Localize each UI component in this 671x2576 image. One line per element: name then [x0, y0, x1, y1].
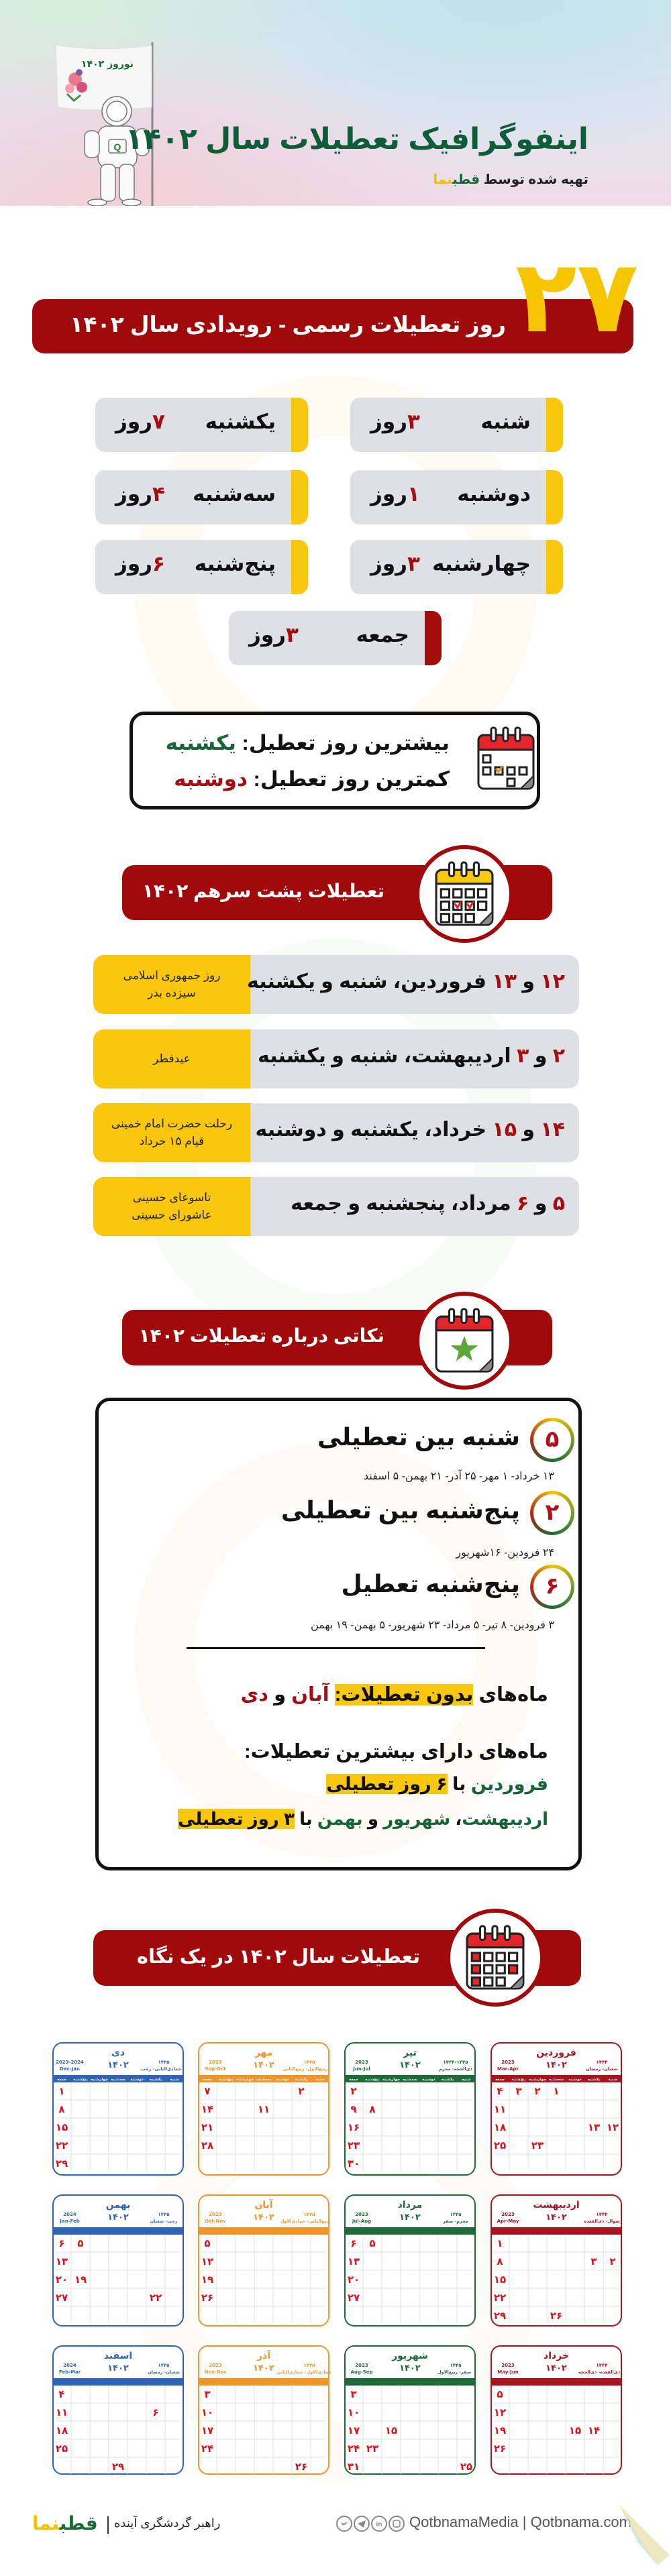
calendar: تیر: ۱۴۴۴-۱۴۴۵	[443, 2060, 468, 2065]
calendar: خرداد: ۱۵	[569, 2424, 581, 2437]
row: اردیبهشت	[93, 1029, 579, 1088]
calendar: شهریور: شهریور	[391, 2351, 428, 2361]
calendar: شهریور: ۱۴۰۲	[399, 2363, 421, 2373]
calendar: دی: ۲۹	[56, 2158, 68, 2170]
note 3 heading: پنج‌شنبه تعطیل	[341, 1570, 520, 1598]
weekday labels: چهارشنبه	[529, 2078, 546, 2082]
calendar: اردیبهشت: ۱۴۴۴	[596, 2212, 608, 2217]
panel: day counts	[95, 398, 563, 665]
calendar: دی: ۲۲	[56, 2139, 68, 2151]
note 2 dates: ۲۴ فرودین- ۱۶شهریور	[456, 1547, 554, 1559]
day: دوشنبه: دوشنبه	[457, 482, 531, 506]
calendar: اسفند: ۶	[152, 2406, 159, 2418]
calendar: مرداد: ۲۰	[348, 2274, 360, 2286]
day: سه‌شنبه	[95, 470, 308, 524]
row: فروردین: ۱۲ و ۱۳ فروردین، شنبه و یکشنبه	[247, 970, 565, 993]
calendar: اردیبهشت: ۱۵	[494, 2274, 506, 2286]
calendar: تیر: ۲	[350, 2085, 357, 2097]
calendar: مهر: ۱۴۰۲	[253, 2060, 274, 2070]
day: یکشنبه: ۷روز	[115, 410, 165, 433]
calendar: اردیبهشت	[491, 2195, 621, 2326]
farvardin line: فروردین با ۶ روز تعطیلی	[326, 1774, 548, 1794]
note 3 badge: ۶	[546, 1573, 559, 1599]
row: فروردین: روز جمهوری اسلامی	[123, 969, 220, 982]
banner: 27 days	[32, 299, 633, 353]
background watermark 4	[134, 2079, 537, 2481]
weekday labels: چهارشنبه	[91, 2078, 108, 2082]
calendar: مهر: ۱۱	[258, 2103, 270, 2115]
row: خرداد	[93, 1103, 579, 1162]
calendar: مرداد: ۶	[350, 2237, 357, 2249]
calendar: آذر: ۱۴۴۵	[303, 2363, 315, 2368]
text: least holiday day: کمترین روز تعطیل: دوشنبه	[174, 767, 450, 791]
day: پنج‌شنبه: ۶روز	[115, 552, 165, 575]
calendar: فروردین: ۱	[553, 2085, 560, 2097]
calendar: خرداد: خرداد	[544, 2351, 569, 2361]
social icons	[336, 2516, 405, 2532]
calendar: بهمن: 2024	[63, 2212, 76, 2217]
calendar: آذر: آذر	[256, 2349, 271, 2361]
calendar: مهر	[199, 2043, 329, 2175]
calendar: اسفند: ۱۸	[56, 2424, 68, 2437]
row: مرداد: عاشورای حسینی	[132, 1209, 212, 1221]
calendar: بهمن: ۱۹	[74, 2274, 87, 2286]
tagline: راهبر گردشگری آینده	[114, 2516, 220, 2530]
icon: calendar star	[415, 1292, 513, 1390]
weekday labels: پنج‌شنبه	[219, 2078, 234, 2082]
illustration: astronaut with flag: Q	[114, 142, 121, 152]
calendar: شهریور: ۲۴	[348, 2443, 360, 2455]
calendar: بهمن: ۱۳	[56, 2255, 68, 2267]
calendar: مرداد	[345, 2195, 475, 2326]
other months line: اردیبهشت، شهریور و بهمن با ۳ روز تعطیلی	[178, 1809, 548, 1829]
calendar: دی: ۱۴۴۵	[158, 2060, 170, 2065]
calendar: بهمن: ۱۴۴۵	[158, 2212, 170, 2217]
note 1 badge: ۵	[546, 1426, 559, 1452]
banner title: روز تعطیلات رسمی - رویدادی سال ۱۴۰۲	[70, 312, 506, 337]
calendar: خرداد: ۱۴۰۲	[546, 2363, 567, 2373]
calendar: اسفند: ۱۱	[56, 2406, 68, 2418]
calendar: اردیبهشت: ۲	[609, 2255, 616, 2267]
day: جمعه: ۳روز	[249, 623, 299, 647]
calendar: مرداد: 2023	[355, 2212, 368, 2217]
calendar: تیر: ۳۰	[348, 2158, 360, 2170]
calendar: اردیبهشت: شوال- ذی‌القعده	[584, 2219, 620, 2224]
weekday labels: جمعه	[57, 2078, 66, 2082]
calendar: شهریور: ۱۷	[348, 2424, 360, 2437]
background watermark 2	[134, 939, 537, 1355]
calendar: مهر: ۱۴۴۵	[303, 2060, 315, 2065]
footer	[32, 2505, 670, 2565]
calendar: اسفند: ۱۴۰۲	[107, 2363, 129, 2373]
calendar: مرداد: Jul-Aug	[352, 2219, 371, 2224]
heading: year at a glance	[93, 1930, 581, 1986]
calendar: اردیبهشت: ۲۹	[494, 2310, 506, 2322]
calendar: تیر: ۱۴۰۲	[399, 2060, 421, 2070]
hero header	[0, 0, 671, 206]
separator	[107, 2516, 109, 2534]
day: سه‌شنبه: ۴روز	[115, 482, 165, 506]
weekday labels: شنبه	[315, 2078, 325, 2082]
calendar: آذر: ۱۰	[201, 2406, 213, 2418]
calendar: آبان: آبان	[254, 2198, 274, 2210]
day: شنبه: شنبه	[480, 410, 531, 433]
calendar: فروردین	[491, 2043, 621, 2175]
note 3 dates: ۳ فرودین- ۸ تیر- ۵ مرداد- ۲۳ شهریور- ۵ بهمن- ۱۹ بهمن	[311, 1620, 554, 1631]
calendar: آبان: ۱۴۴۵	[303, 2212, 315, 2217]
calendars grid	[52, 2042, 622, 2475]
calendar: تیر: ۱۶	[348, 2121, 360, 2133]
calendar: شهریور	[345, 2346, 475, 2474]
website text: QotbnamaMedia | Qotbnama.com	[409, 2514, 631, 2530]
weekday labels: شنبه	[170, 2078, 179, 2082]
logo: قطبنما	[32, 2513, 98, 2534]
calendar: شهریور: ۲۵	[460, 2461, 472, 2473]
calendar: شهریور: ۳	[350, 2388, 357, 2400]
day: یکشنبه: یکشنبه	[205, 410, 276, 433]
note 2 badge	[530, 1491, 574, 1535]
calendar: مهر: ۲۸	[201, 2139, 213, 2151]
calendar: اردیبهشت: 2023	[501, 2212, 515, 2217]
calendar: خرداد: May-Jun	[497, 2369, 519, 2375]
calendar: تیر: ۹	[350, 2103, 357, 2115]
calendar: بهمن: رجب- شعبان	[150, 2219, 178, 2224]
calendar: مرداد: ۵	[369, 2237, 376, 2249]
big number 27: ۲۷	[515, 240, 638, 353]
calendar: اسفند: Feb-Mar	[59, 2369, 81, 2375]
calendar: اسفند: ۱۴۴۵	[158, 2363, 170, 2368]
calendar: فروردین: شعبان- رمضان	[586, 2066, 618, 2072]
calendar: دی: جمادی‌الثانی- رجب	[141, 2066, 181, 2072]
calendar: اردیبهشت: Apr-May	[497, 2219, 519, 2224]
calendar: آبان: ۱۹	[201, 2274, 213, 2286]
weekday labels: سه‌شنبه	[403, 2078, 417, 2082]
note 3 badge	[530, 1565, 574, 1609]
day: چهارشنبه: ۳روز	[370, 552, 420, 575]
calendar: آبان: ۱۴۰۲	[253, 2213, 274, 2223]
calendar: اسفند: ۲۵	[56, 2443, 68, 2455]
calendar: مهر: مهر	[254, 2048, 272, 2058]
calendar: شهریور: ۱۰	[348, 2406, 360, 2418]
day: جمعه: جمعه	[356, 623, 409, 647]
note 1 dates: ۱۳ خرداد- ۱ مهر- ۲۵ آذر- ۲۱ بهمن- ۵ اسفند	[364, 1471, 554, 1482]
calendar: شهریور: ۱۵	[385, 2424, 397, 2437]
calendar: شهریور: صفر- ربیع‌الاول	[437, 2369, 471, 2375]
weekday labels: پنج‌شنبه	[511, 2078, 526, 2082]
illustration: astronaut with flag	[55, 42, 153, 206]
row: خرداد: ۱۴ و ۱۵ خرداد، یکشنبه و دوشنبه	[256, 1119, 565, 1141]
calendar: خرداد	[491, 2346, 621, 2474]
calendar: فروردین: ۱۸	[494, 2121, 506, 2133]
day: چهارشنبه	[350, 540, 563, 594]
calendar: مرداد: ۱۴۴۵	[450, 2212, 462, 2217]
calendar: مرداد: ۲۷	[348, 2292, 360, 2304]
heading text: نکاتی درباره تعطیلات ۱۴۰۲	[139, 1325, 384, 1346]
calendar: فروردین: ۱۱	[494, 2103, 506, 2115]
calendar: خرداد: ۱۴۴۴	[596, 2363, 608, 2368]
weekday labels: دوشنبه	[130, 2078, 144, 2082]
calendar: بهمن: Jan-Feb	[59, 2219, 80, 2224]
day: چهارشنبه: چهارشنبه	[432, 552, 531, 575]
weekday labels: شنبه	[608, 2078, 617, 2082]
calendar: فروردین: ۲۳	[531, 2139, 544, 2151]
calendar: تیر: تیر	[403, 2048, 417, 2058]
calendar: شهریور: 2023	[355, 2363, 368, 2368]
calendar: فروردین: ۴	[497, 2085, 503, 2097]
row: مرداد: تاسوعای حسینی	[133, 1191, 211, 1204]
calendar: تیر: Jun-Jul	[352, 2066, 370, 2072]
weekday labels: دوشنبه	[422, 2078, 435, 2082]
callout: most/least holiday day	[130, 712, 540, 809]
calendar: خرداد: ۵	[497, 2388, 503, 2400]
calendar: مهر: ۲	[298, 2085, 305, 2097]
calendar: اردیبهشت: ۲۶	[550, 2310, 562, 2322]
divider	[187, 1647, 485, 1649]
background watermark 3	[134, 1442, 537, 1858]
day: جمعه	[229, 611, 442, 665]
calendar: اسفند: ۴	[58, 2388, 65, 2400]
text: most holiday day: بیشترین روز تعطیل: یکشنبه	[166, 731, 450, 754]
calendar: فروردین: Mar-Apr	[497, 2066, 519, 2072]
calendar: خرداد: ذی‌القعده- ذی‌الحجه	[578, 2369, 621, 2375]
calendar: فروردین: 2023	[501, 2060, 515, 2065]
subtitle: تهیه شده توسط قطبنما	[433, 172, 588, 187]
calendar: فروردین: ۱۲	[607, 2121, 619, 2133]
weekday labels	[57, 2077, 617, 2082]
calendar: دی: 2023-2024	[56, 2060, 84, 2065]
calendar: آبان: ۱۲	[201, 2255, 213, 2267]
note 1 badge	[530, 1418, 574, 1462]
calendar: دی	[53, 2043, 183, 2175]
weekday labels: چهارشنبه	[236, 2078, 254, 2082]
heading: notes	[122, 1310, 552, 1365]
row: اردیبهشت: ۲ و ۳ اردیبهشت، شنبه و یکشنبه	[258, 1045, 565, 1067]
day: پنج‌شنبه	[95, 540, 308, 594]
day: سه‌شنبه: سه‌شنبه	[193, 482, 276, 506]
row: فروردین: سیزده بدر	[148, 987, 196, 999]
calendar: اسفند: ۲۹	[112, 2461, 124, 2473]
note 2 heading: پنج‌شنبه بین تعطیلی	[281, 1496, 520, 1524]
calendar: فروردین: ۱۴۴۴	[596, 2060, 608, 2065]
weekday labels: سه‌شنبه	[256, 2078, 271, 2082]
calendar: دی: دی	[111, 2048, 125, 2058]
weekday labels: سه‌شنبه	[549, 2078, 564, 2082]
calendar: آذر: Nov-Dec	[205, 2369, 226, 2375]
calendar: مرداد: ۱۴۰۲	[399, 2213, 421, 2223]
calendar: اسفند: اسفند	[104, 2351, 132, 2361]
months with most holidays: ماه‌های دارای بیشترین تعطیلات:	[244, 1741, 548, 1762]
heading text: تعطیلات پشت سرهم ۱۴۰۲	[142, 881, 384, 901]
day: شنبه	[350, 398, 563, 452]
calendar: مهر: ربیع‌الاول- ربیع‌الثانی	[282, 2066, 328, 2072]
weekday labels: یکشنبه	[150, 2077, 162, 2082]
day: دوشنبه	[350, 470, 563, 524]
calendar: مهر: 2023	[209, 2060, 222, 2065]
calendar: اردیبهشت: ۳	[590, 2255, 597, 2267]
calendar: مرداد: ۱۳	[348, 2255, 360, 2267]
calendar: مهر: ۲۱	[201, 2121, 213, 2133]
calendar: اسفند: 2024	[63, 2363, 76, 2368]
calendar: دی: Dec-Jan	[60, 2066, 80, 2072]
calendar: مهر: ۷	[204, 2085, 211, 2097]
weekday labels: یکشنبه	[295, 2077, 307, 2082]
calendar: فروردین: ۱۴۰۲	[546, 2060, 567, 2070]
calendar: شهریور: ۳۱	[348, 2461, 360, 2473]
calendar: فروردین: فروردین	[536, 2048, 576, 2058]
calendar: اسفند	[53, 2346, 183, 2474]
calendar: بهمن: ۱۴۰۲	[107, 2213, 129, 2223]
calendar: دی: ۸	[58, 2103, 65, 2115]
row: فروردین	[93, 955, 579, 1014]
calendar: آذر: ۱۴۰۲	[253, 2363, 274, 2373]
calendar: تیر: ذی‌الحجه- محرم	[439, 2066, 473, 2072]
calendar: آذر: ۲۶	[295, 2461, 307, 2473]
calendar: اردیبهشت: ۱	[497, 2237, 503, 2249]
illustration: astronaut with flag: نوروز ۱۴۰۲	[81, 59, 134, 70]
calendar: تیر: 2023	[355, 2060, 368, 2065]
calendar: خرداد: ۱۲	[494, 2406, 506, 2418]
calendar: بهمن: بهمن	[106, 2200, 130, 2210]
calendar: تیر: ۲۳	[348, 2139, 360, 2151]
calendar: اسفند: شعبان- رمضان	[148, 2369, 180, 2375]
calendar: اردیبهشت: ۸	[497, 2255, 503, 2267]
weekday labels: دوشنبه	[276, 2078, 289, 2082]
panel: notes	[95, 1398, 582, 1870]
weekday labels: پنج‌شنبه	[73, 2078, 88, 2082]
background watermark	[134, 376, 537, 791]
calendar: دی: ۱	[58, 2085, 65, 2097]
weekday labels: پنج‌شنبه	[365, 2078, 380, 2082]
calendar: آبان: Oct-Nov	[205, 2219, 226, 2224]
calendar: بهمن: ۲۷	[56, 2292, 68, 2304]
calendar: آبان: 2023	[209, 2212, 222, 2217]
calendar: آبان: ۵	[204, 2237, 211, 2249]
calendar: بهمن: ۶	[58, 2237, 65, 2249]
calendar: بهمن	[53, 2195, 183, 2326]
calendar: بهمن: ۵	[77, 2237, 84, 2249]
day: شنبه: ۳روز	[370, 410, 420, 433]
calendar: مهر: Sep-Oct	[205, 2066, 226, 2072]
heading: back-to-back holidays	[122, 865, 552, 920]
calendar: مرداد: مرداد	[398, 2200, 422, 2210]
calendar: خرداد: ۱۴	[588, 2424, 600, 2437]
calendar: اردیبهشت: اردیبهشت	[533, 2200, 580, 2210]
calendar: آذر: ۱۷	[201, 2424, 213, 2437]
calendar: شهریور: ۲۳	[366, 2443, 378, 2455]
calendar: آذر: جمادی‌الاول- جمادی‌الثانی	[276, 2369, 331, 2375]
weekday labels: یکشنبه	[588, 2077, 600, 2082]
day: دوشنبه: ۱روز	[370, 482, 420, 506]
calendar: آبان: ۲۶	[201, 2292, 213, 2304]
weekday labels: چهارشنبه	[382, 2078, 400, 2082]
calendar: خرداد: 2023	[501, 2363, 515, 2368]
calendar: تیر	[345, 2043, 475, 2175]
weekday labels: دوشنبه	[568, 2078, 582, 2082]
row: مرداد	[93, 1177, 579, 1236]
row: مرداد: ۵ و ۶ مرداد، پنجشنبه و جمعه	[291, 1192, 565, 1215]
calendar: بهمن: ۲۲	[150, 2292, 162, 2304]
weekday labels: یکشنبه	[442, 2077, 454, 2082]
social icons: in	[376, 2521, 382, 2528]
calendar: اردیبهشت: ۱۴۰۲	[546, 2213, 567, 2223]
corner decoration	[619, 2505, 670, 2565]
calendar: اردیبهشت: ۲۲	[494, 2292, 506, 2304]
note 1 heading: شنبه بین تعطیلی	[317, 1423, 520, 1451]
note 2 badge: ۲	[546, 1500, 559, 1525]
row: اردیبهشت: عیدفطر	[153, 1052, 191, 1065]
day: یکشنبه	[95, 398, 308, 452]
calendar: تیر: ۸	[369, 2103, 376, 2115]
calendar: مرداد: محرم- صفر	[442, 2219, 468, 2224]
calendar: فروردین: ۲	[534, 2085, 541, 2097]
weekday labels: سه‌شنبه	[111, 2078, 125, 2082]
calendar: فروردین: ۲۵	[494, 2139, 506, 2151]
row: خرداد: رحلت حضرت امام خمینی	[111, 1117, 232, 1130]
calendar: آذر: 2023	[209, 2363, 222, 2368]
icon: calendar check	[478, 727, 534, 790]
calendar: آذر	[199, 2346, 331, 2474]
icon: calendar two checks	[415, 845, 513, 943]
calendar: آذر: ۳	[204, 2388, 211, 2400]
title: اینفوگرافیک تعطیلات سال ۱۴۰۲	[125, 123, 588, 156]
heading text: تعطیلات سال ۱۴۰۲ در یک نگاه	[137, 1946, 420, 1968]
calendar: فروردین: ۳	[515, 2085, 522, 2097]
weekday labels: جمعه	[203, 2078, 212, 2082]
icon: calendar red days	[446, 1909, 544, 2007]
row: خرداد: قیام ۱۵ خرداد	[140, 1135, 204, 1147]
calendar: دی: ۱۵	[56, 2121, 68, 2133]
day: پنج‌شنبه: پنج‌شنبه	[195, 552, 276, 575]
calendar: آبان: ربیع‌الثانی- جمادی‌الاول	[280, 2219, 331, 2224]
calendar: دی: ۱۴۰۲	[107, 2060, 129, 2070]
calendar: مهر: ۱۴	[201, 2103, 213, 2115]
calendar: شهریور: ۱۴۴۵	[450, 2363, 462, 2368]
calendar: خرداد: ۲۶	[494, 2443, 506, 2455]
calendar: فروردین: ۱۳	[588, 2121, 600, 2133]
calendar: خرداد: ۱۹	[494, 2424, 506, 2437]
calendar: آذر: ۲۴	[201, 2443, 213, 2455]
weekday labels: شنبه	[462, 2078, 471, 2082]
calendar: بهمن: ۲۰	[56, 2274, 68, 2286]
calendar: شهریور: Aug-Sep	[350, 2369, 373, 2375]
weekday labels: جمعه	[495, 2078, 505, 2082]
weekday labels: جمعه	[349, 2078, 358, 2082]
months without holidays: ماه‌های بدون تعطیلات: آبان و دی	[241, 1684, 548, 1705]
calendar: آبان	[199, 2195, 331, 2326]
